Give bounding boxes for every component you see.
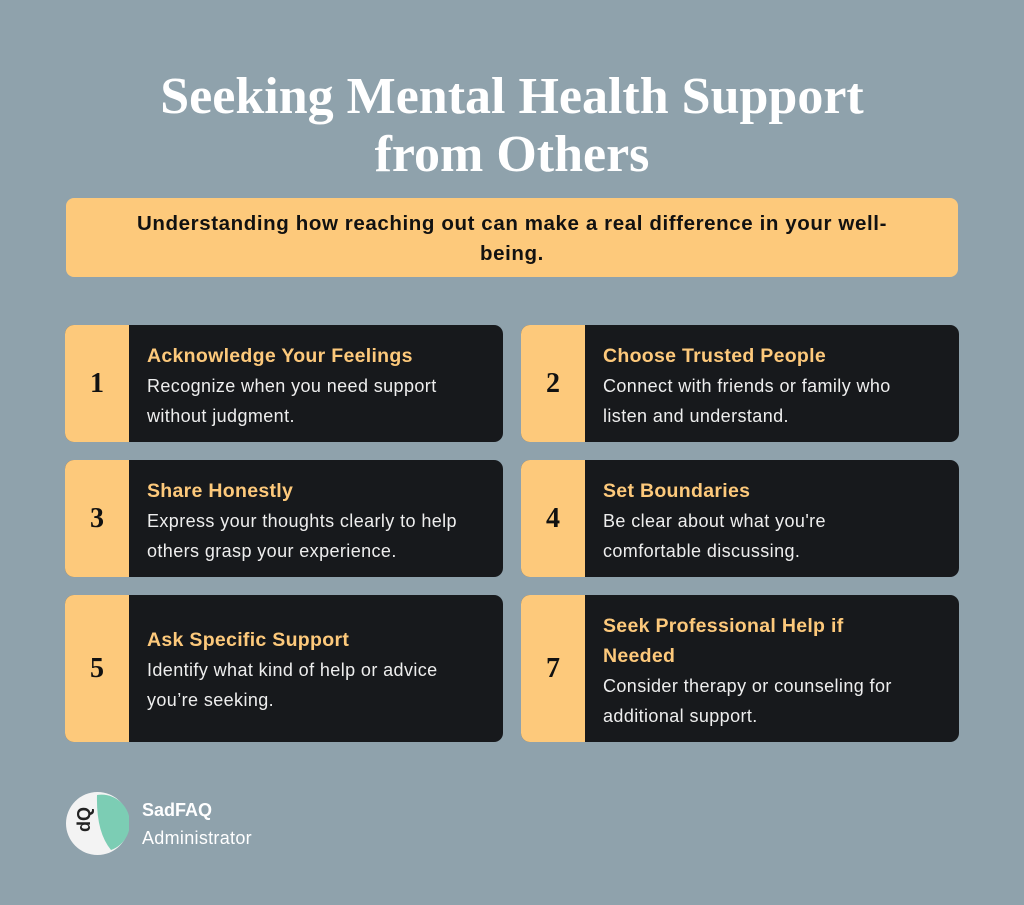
icon: avatar <box>66 792 129 855</box>
card 3: 3 <box>90 502 104 534</box>
title: from Others <box>375 126 649 183</box>
card 2 <box>521 325 959 442</box>
card 1: Acknowledge Your Feelings <box>147 345 413 367</box>
subtitle banner <box>66 198 958 277</box>
icon: avatar: dQ <box>74 807 94 832</box>
card 4: 4 <box>546 502 560 534</box>
card 1 <box>65 325 503 442</box>
title <box>160 68 864 183</box>
card 1: 1 <box>90 368 104 398</box>
card 3 <box>65 460 503 577</box>
card 7: Seek Professional Help if Needed <box>603 615 844 667</box>
card 5: Ask Specific Support <box>147 629 349 651</box>
card 5: Identify what kind of help or advice you’re seeking. <box>147 660 438 710</box>
card 7: 7 <box>546 652 560 684</box>
subtitle banner: Understanding how reaching out can make a real difference in your well-being. <box>137 212 887 265</box>
card 7 <box>521 595 959 742</box>
card 4: Be clear about what you're comfortable discussing. <box>603 511 826 561</box>
title: Seeking Mental Health Support <box>160 68 864 125</box>
card 3: Express your thoughts clearly to help others grasp your experience. <box>147 511 457 561</box>
card 1: Recognize when you need support without judgment. <box>147 376 437 426</box>
card 2: Choose Trusted People <box>603 345 826 367</box>
card 5 <box>65 595 503 742</box>
card 7: Consider therapy or counseling for additional support. <box>603 676 892 726</box>
author role: Administrator <box>142 828 252 848</box>
card 3: Share Honestly <box>147 480 293 502</box>
card 2: 2 <box>546 368 560 398</box>
card 4: Set Boundaries <box>603 480 750 502</box>
author name: SadFAQ <box>142 800 212 820</box>
card 5: 5 <box>90 652 104 684</box>
card 4 <box>521 460 959 577</box>
card 2: Connect with friends or family who listen and understand. <box>603 376 891 426</box>
